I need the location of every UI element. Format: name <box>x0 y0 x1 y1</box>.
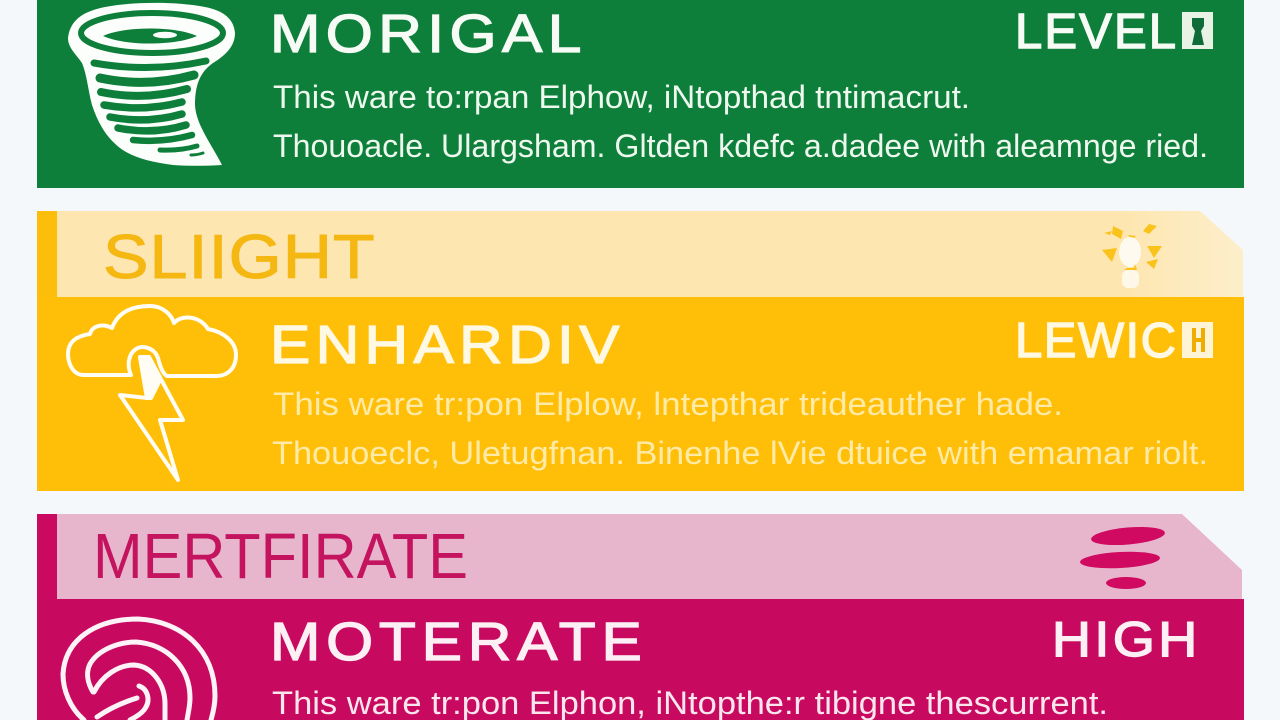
icon: tornado bands <box>1080 524 1166 589</box>
heading: slight: SLIIGHT <box>103 222 375 291</box>
heading: morigal: MORIGAL <box>270 4 581 64</box>
icon: light bulb <box>1102 224 1162 288</box>
heading: mertfirate: MERTFIRATE <box>93 520 468 592</box>
icon: spiral <box>63 619 215 720</box>
text: enhardiv description line 1: This ware tr:pon Elplow, lntepthar trideauther hade. <box>273 386 1063 422</box>
panel: moterate (magenta) <box>37 599 1244 720</box>
label: lewich: LEWIC <box>1015 314 1176 368</box>
heading: moterate: MOTERATE <box>270 612 642 672</box>
label: high: HIGH <box>1052 611 1197 666</box>
panel: enhardiv (yellow) <box>37 297 1244 491</box>
label: level: LEVEL <box>1015 5 1176 59</box>
panel: mertfirate header <box>37 514 1242 599</box>
text: morigal description line 2: Thouoacle. Ulargsham. Gltden kdefc a.dadee with aleamnge ried. <box>273 128 1208 164</box>
icon: storm cloud with lightning <box>68 306 236 480</box>
text: moterate description line 1: This ware tr:pon Elphon, iNtopthe:r tibigne thescurrent. <box>272 685 1108 720</box>
text: enhardiv description line 2: Thouoeclc, Uletugfnan. Binenhe lVie dtuice with emamar riolt. <box>272 435 1208 471</box>
panel: slight header <box>37 211 1243 297</box>
icon: tornado <box>68 3 235 166</box>
text: morigal description line 1: This ware to:rpan Elphow, iNtopthad tntimacrut. <box>273 79 970 115</box>
panel: morigal (green) <box>37 0 1244 188</box>
heading: enhardiv: ENHARDIV <box>270 315 619 375</box>
